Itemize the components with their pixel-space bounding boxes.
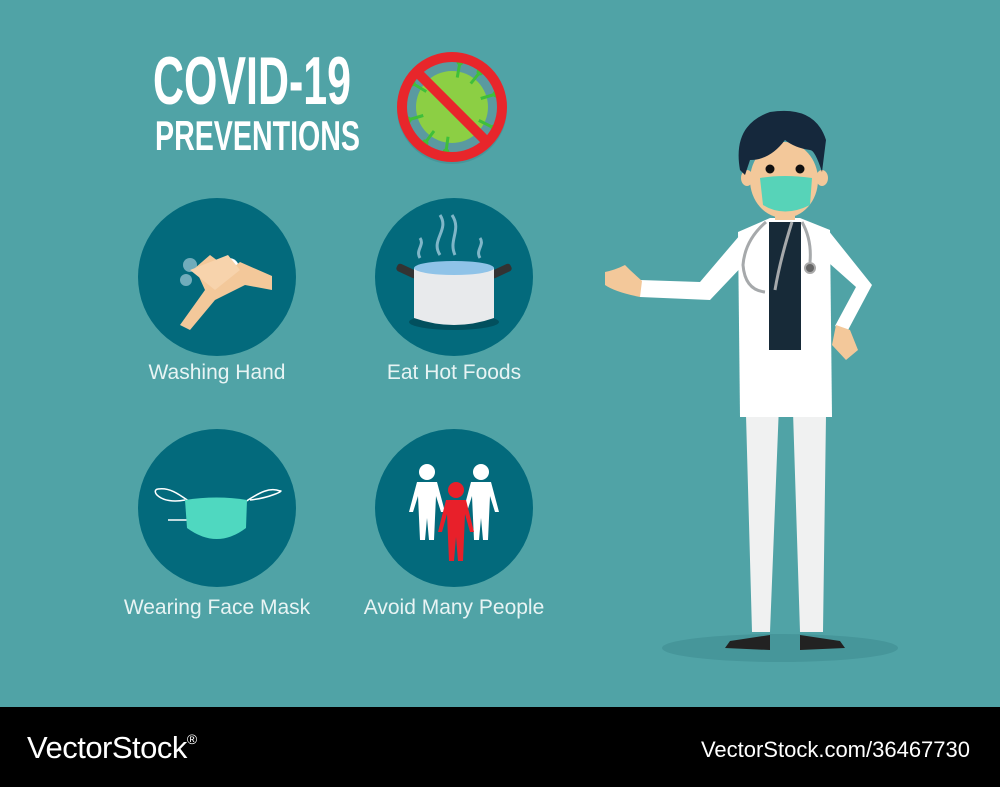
left arm [640,235,748,300]
panel: face mask [124,429,311,619]
icon: people [409,464,499,561]
label: Avoid Many People [364,596,544,619]
label: Washing Hand [149,361,285,384]
title: PREVENTIONS [155,112,360,159]
title: COVID-19 [153,43,351,119]
icon: no virus [397,54,507,164]
head [775,200,795,220]
label: Wearing Face Mask [124,596,311,619]
label: Eat Hot Foods [387,361,521,384]
footer bar: VectorStock.com/36467730 [701,737,970,762]
stethoscope [743,222,810,292]
right arm [820,230,872,332]
title [153,43,360,159]
pants [746,380,826,632]
panel: washing hand [138,198,296,384]
footer bar: VectorStock [27,730,187,765]
icon: hands [180,255,272,330]
panel: avoid many people [364,429,544,619]
icon: mask [155,489,281,539]
shoes [725,635,770,650]
panel: hot foods [375,198,533,384]
icon: pot [395,215,513,330]
footer bar [0,707,1000,787]
coat [738,218,832,417]
footer bar: ® [187,731,198,747]
doctor illustration [605,111,898,662]
